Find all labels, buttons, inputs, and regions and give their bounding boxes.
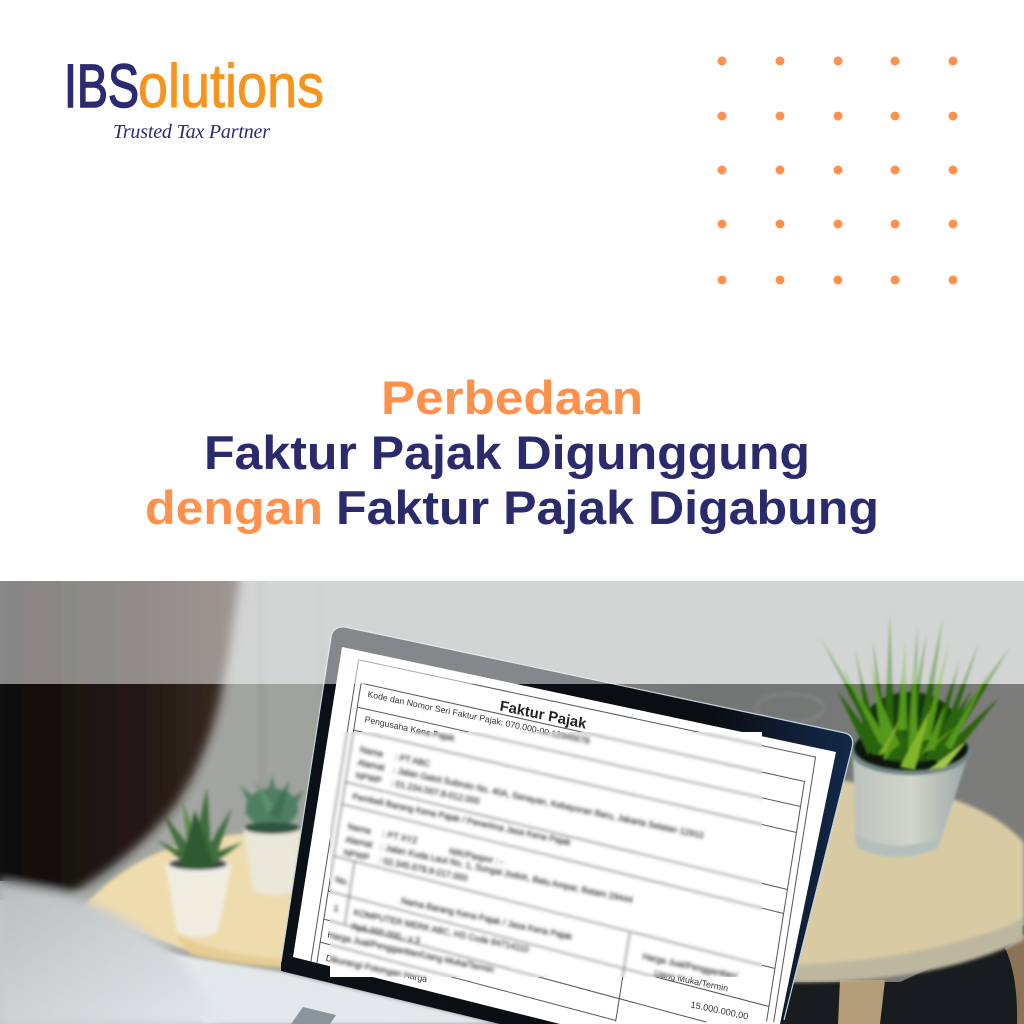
document: blurred patch: : 01.234.567.8-012.000	[390, 778, 481, 806]
laptop edge highlight	[281, 627, 853, 1020]
document: blurred patch: Nama Barang Kena Pajak / Jasa Kena Pajak	[400, 896, 573, 942]
document: blurred patch: Nama	[347, 821, 372, 836]
document: blurred patch: 1	[333, 903, 340, 914]
laptop screen	[293, 647, 836, 1024]
light overlay band across top of photo	[0, 581, 1024, 684]
title	[145, 371, 879, 534]
title: Faktur Pajak Digunggung	[204, 426, 810, 479]
document: Faktur Pajak sharp layer: Harga Jual/Penggantian/Uang Muka/Termin	[327, 930, 495, 975]
document: blurred patch: Faktur Pajak	[499, 699, 588, 733]
person: head and shirt	[0, 560, 242, 1024]
document: blurred patch: Pengusaha Kena Pajak	[364, 714, 456, 743]
decorative dot grid	[718, 56, 958, 284]
title: dengan	[145, 481, 323, 534]
left table and laptop base	[78, 830, 500, 1024]
photo: person at laptop showing Faktur Pajak	[0, 560, 1024, 1024]
logo tagline: Trusted Tax Partner	[113, 121, 270, 143]
document: blurred patch: NPWP	[355, 770, 383, 785]
document: blurred patch: NIK/Paspor : -	[449, 846, 504, 867]
document: blurred patch: NPWP	[343, 847, 370, 862]
logo wordmark: IBS	[64, 52, 139, 120]
document: blurred patch: Harga Jual/Penggantian/	[642, 951, 738, 981]
title: Perbedaan	[381, 371, 643, 424]
document: blurred patch: Pembeli Barang Kena Pajak / Penerima Jasa Kena Pajak	[352, 791, 572, 847]
room background	[0, 581, 1024, 1024]
logo: IBSolutions Trusted Tax Partner	[64, 52, 324, 143]
document: blurred patch: : PT ABC	[394, 752, 431, 769]
right stool table	[770, 780, 1024, 1024]
document: blurred patch: Nama	[359, 744, 384, 759]
document: blurred patch: Uang Muka/Termin	[654, 968, 727, 993]
document: Faktur Pajak sharp layer: Kode dan Nomor Seri Faktur Pajak: 070.000-00.12345678	[367, 689, 591, 746]
document: Faktur Pajak sharp layer: 15.000.000,00	[690, 999, 749, 1022]
document: blurred patch: Harga Jual/Penggantian/Uang Muka/Termin	[327, 930, 495, 975]
title: Faktur Pajak Digabung	[336, 481, 879, 534]
plant: small potted plants on left table	[157, 775, 304, 937]
document: Faktur Pajak sharp layer	[301, 660, 816, 1024]
document: Faktur Pajak sharp layer: Pengusaha Kena Pajak	[364, 714, 456, 743]
document: Faktur Pajak sharp layer: Uang Muka/Termin	[654, 968, 729, 993]
document: blurred patch: Rp5.000.000,- x 3	[351, 921, 421, 946]
laptop	[281, 627, 853, 1024]
document: blurred patch	[330, 732, 762, 977]
document: blurred patch: : PT XYZ	[382, 829, 419, 846]
document: blurred patch: Dikurangi Potongan Harga	[325, 953, 428, 984]
document: blurred patch: : 02.345.678.9-217.000	[378, 855, 468, 883]
document: blurred patch: No.	[335, 874, 349, 887]
document: blurred patch: Alamat	[345, 834, 374, 850]
plant: metal pot with green grass	[820, 613, 1010, 857]
document: blurred patch: KOMPUTER MERK ABC, HS Code 84714110	[353, 907, 530, 954]
document: Faktur Pajak sharp layer: Faktur Pajak	[499, 699, 588, 733]
laptop body and bezel	[281, 627, 853, 1024]
document: Faktur Pajak sharp layer: Dikurangi Potongan Harga	[325, 953, 428, 984]
logo wordmark	[64, 52, 324, 120]
document: blurred patch: Alamat	[357, 757, 386, 773]
document: blurred patch: : Jalan Gatot Subroto No. 40A, Senayan, Kebayoran Baru, Jakarta Selatan 12910	[392, 765, 705, 841]
document: blurred patch: Kode dan Nomor Seri Faktur Pajak: 070.000-00.12345678	[367, 689, 591, 746]
laptop keyboard corner	[291, 1007, 336, 1024]
logo wordmark: olutions	[138, 52, 324, 120]
document: blurred patch: : Jalan Kuda Laut No. 1, Sungai Jodoh, Batu Ampar, Batam 29444	[380, 842, 634, 905]
